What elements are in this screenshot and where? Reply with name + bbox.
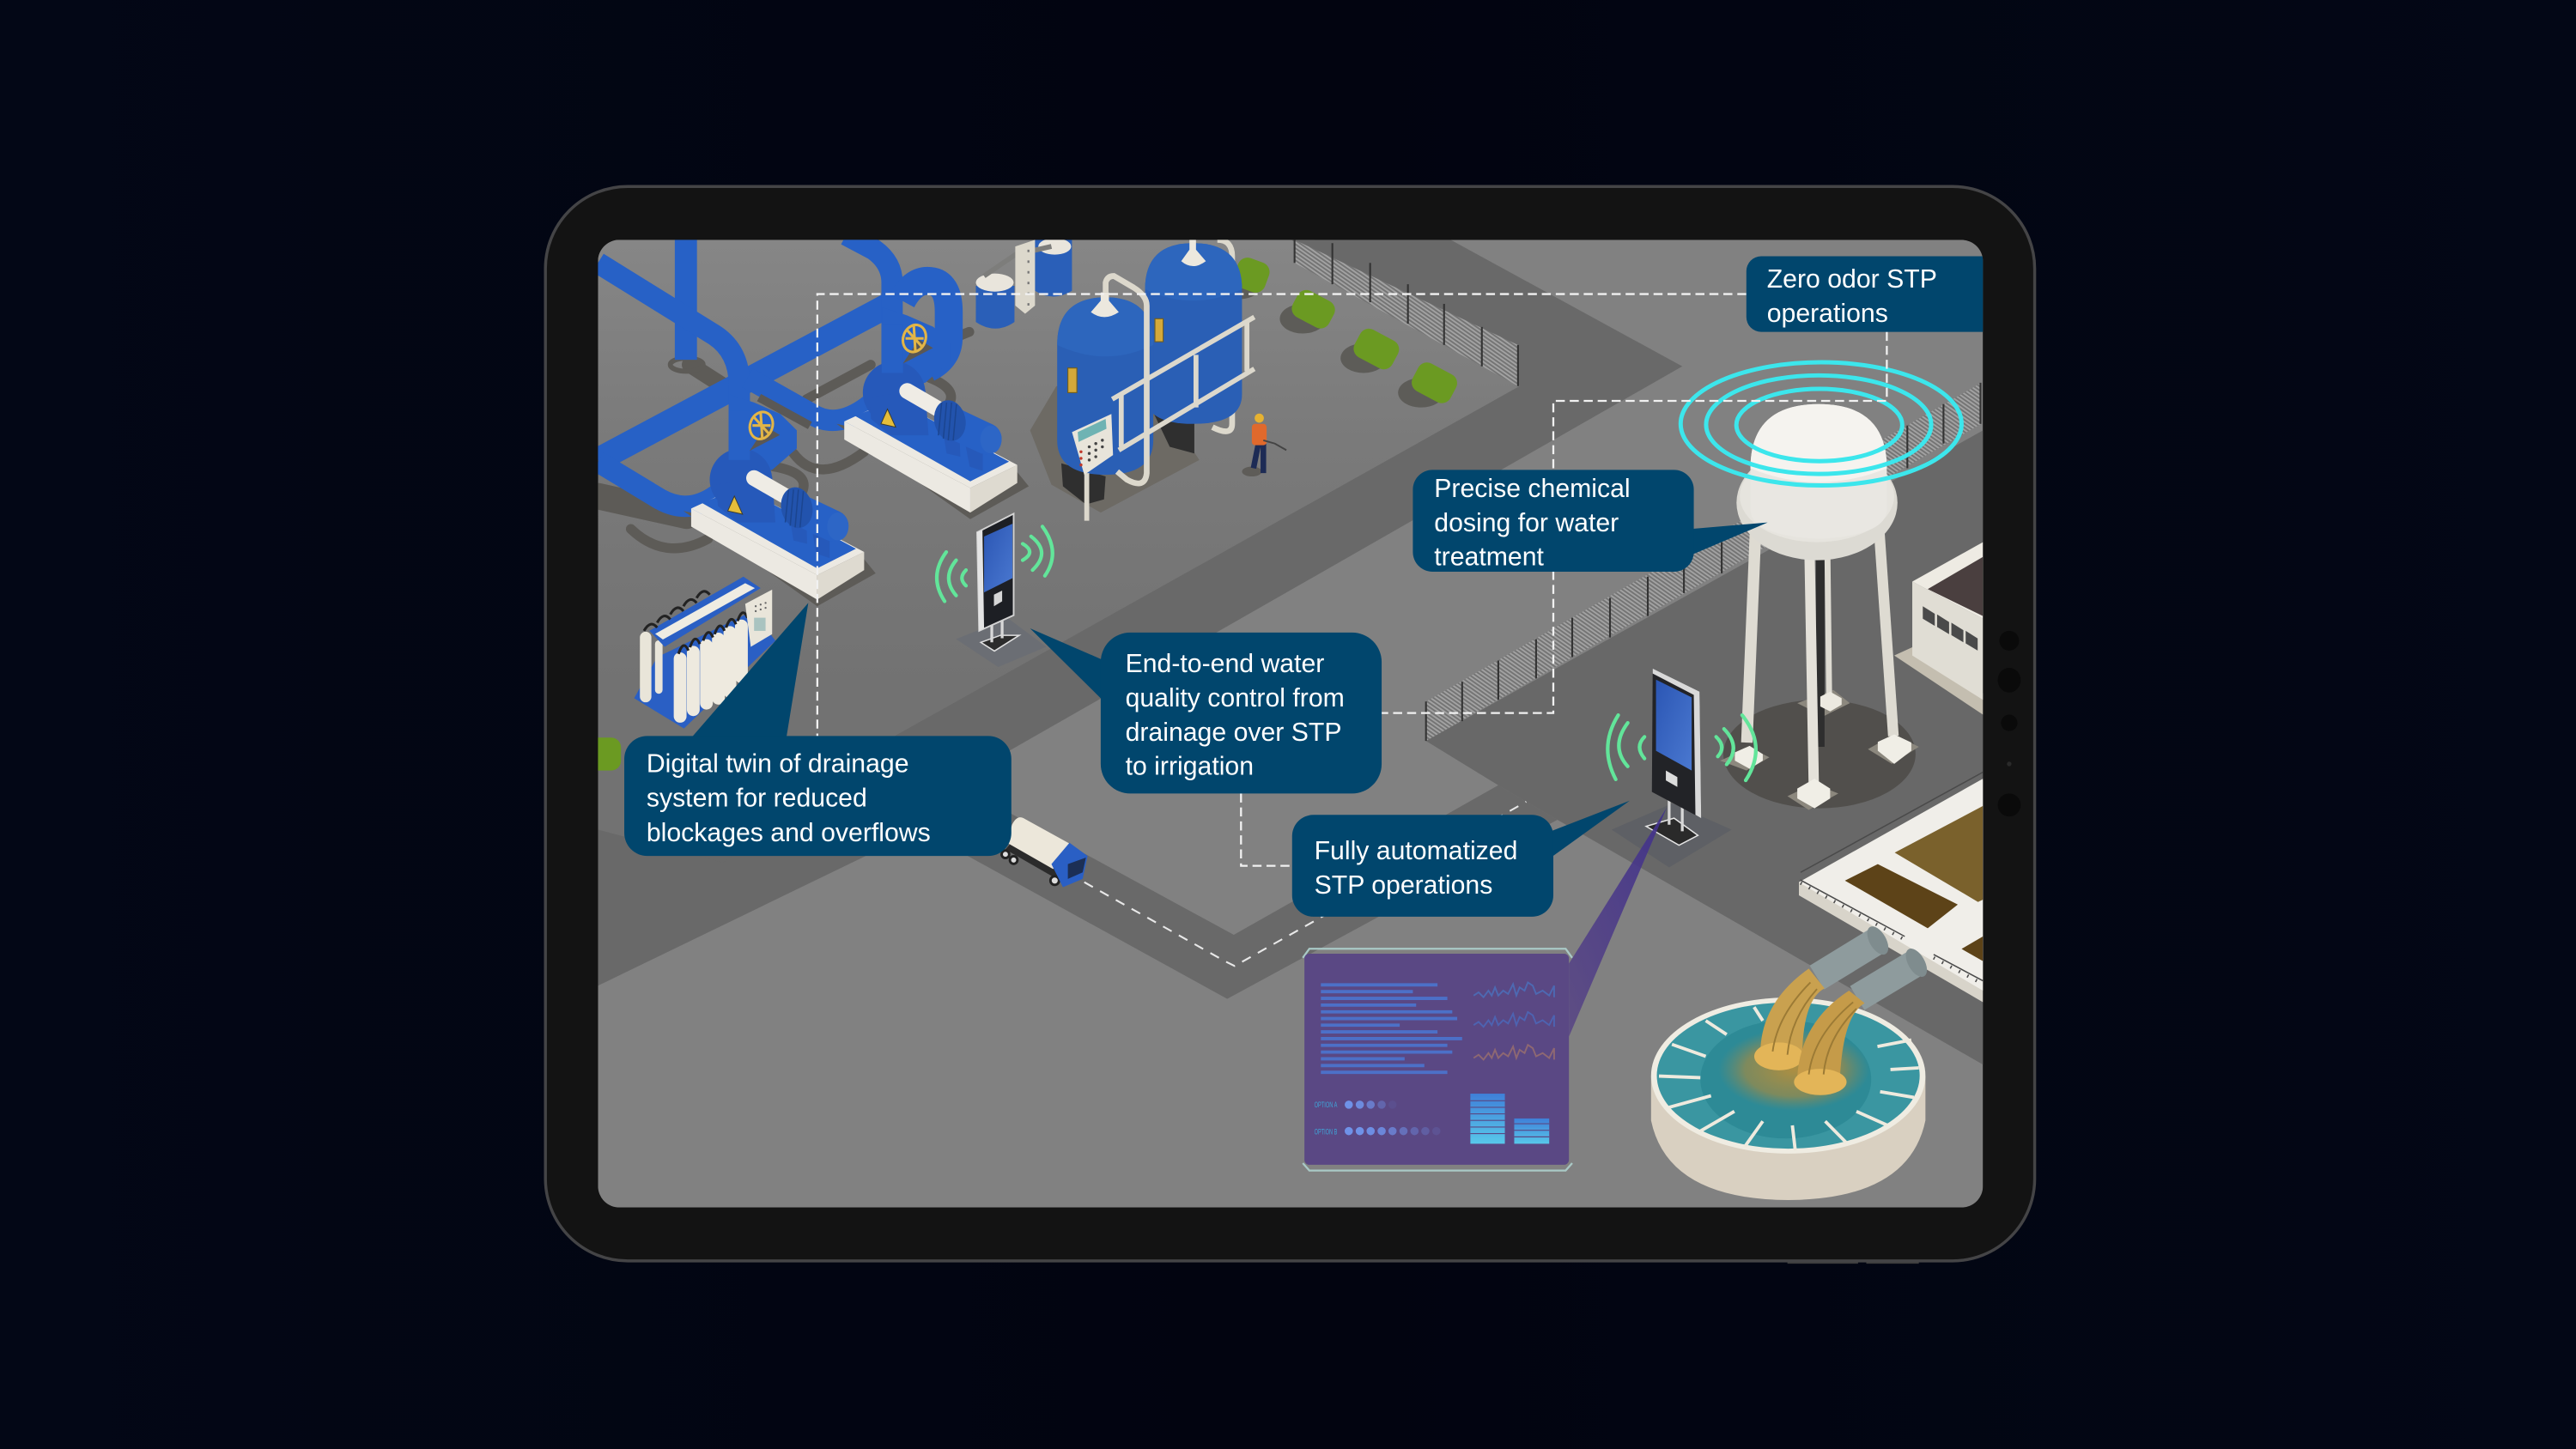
- callout: chemical dosing: Precise chemical: [1434, 475, 1631, 503]
- tanker truck: [1002, 817, 1088, 887]
- front stream: [1797, 991, 1865, 1077]
- motor ribs: [930, 397, 969, 444]
- footing pads: [1720, 690, 1919, 810]
- floor pad: [957, 618, 1046, 667]
- pump and tank lot: [598, 240, 1360, 836]
- asphalt area around tower: [1426, 430, 1983, 1064]
- tablet device: [545, 186, 2035, 1263]
- hoses: [644, 591, 748, 654]
- motor ribs: [777, 484, 817, 531]
- tank two body: [1145, 243, 1242, 424]
- railing posts: [1801, 883, 1983, 984]
- roof interior: [1928, 557, 1983, 616]
- second kiosk wireless signal: [1607, 715, 1756, 780]
- pump housing: [863, 361, 926, 424]
- pump housing: [710, 448, 772, 511]
- callout: water quality: quality control from: [1126, 684, 1345, 712]
- stand: [1646, 818, 1698, 846]
- plinth front: [844, 421, 970, 512]
- tank one plate: [1068, 368, 1077, 392]
- stream texture: [1772, 982, 1856, 1075]
- vertical riser: [680, 239, 692, 360]
- front tubes: [680, 626, 741, 716]
- tank body: [1751, 404, 1886, 539]
- blue pipe network: [598, 235, 949, 506]
- tanker: [1007, 817, 1071, 869]
- worker: [1242, 414, 1286, 476]
- valve body: [883, 307, 950, 390]
- pit two: [1895, 806, 1983, 902]
- plinth shadow: [683, 511, 876, 606]
- right leg: [1880, 534, 1893, 736]
- chassis: [1005, 834, 1070, 881]
- windows: [1923, 606, 1978, 651]
- sparkline three: [1473, 1045, 1554, 1059]
- white drive shaft: [908, 391, 939, 409]
- option b label: OPTION B: [1315, 1127, 1337, 1137]
- reverse osmosis filter unit: [635, 577, 775, 729]
- log lines: [1321, 985, 1462, 1072]
- plinth end: [970, 465, 1018, 512]
- pump neck: [882, 324, 903, 373]
- roof rim: [1912, 543, 1983, 619]
- windscreen: [1068, 858, 1086, 879]
- pit three: [1961, 937, 1983, 961]
- scum stain: [1718, 1028, 1869, 1111]
- weir spokes: [1659, 1007, 1919, 1151]
- callout: zero odor: [1747, 257, 2009, 332]
- gap shadow under feed pipe: [759, 397, 810, 426]
- first kiosk wireless signal: [937, 526, 1053, 601]
- unit base: [635, 611, 775, 729]
- truck route dashes: [1084, 802, 1526, 966]
- motor body: [802, 511, 833, 525]
- tablet bottom edge buttons: [1788, 1262, 1919, 1264]
- bush foliage: [588, 255, 1461, 771]
- platform top: [1799, 779, 1983, 991]
- stand: [981, 635, 1019, 651]
- plinth top lip: [691, 486, 864, 575]
- callout: chemical dosing: treatment: [1434, 543, 1545, 571]
- second pump hoop: [902, 281, 949, 368]
- screen: [984, 524, 1012, 592]
- scanner: [994, 591, 1002, 606]
- option a dots: [1345, 1100, 1396, 1109]
- bushes: [588, 255, 1461, 771]
- left leg: [1747, 534, 1755, 743]
- option a label: OPTION A: [1315, 1100, 1338, 1110]
- motor end cap: [827, 512, 848, 541]
- vest: [1252, 424, 1267, 446]
- callout: automated operations: STP operations: [1315, 871, 1492, 900]
- treatment tanks: [1030, 239, 1255, 521]
- inner water: [1700, 1020, 1871, 1138]
- plinth blue deck: [854, 401, 1009, 482]
- main road band: [699, 240, 1682, 863]
- callout: chemical dosing: [1413, 470, 1768, 572]
- valve body: [729, 394, 797, 476]
- pipe shadows on the ground: [598, 332, 969, 549]
- screen: isometric plant scene: [588, 235, 2009, 1208]
- plinth blue deck: [702, 488, 856, 568]
- feed pipe to second pump: [748, 378, 871, 421]
- callout: water quality: to irrigation: [1126, 752, 1254, 780]
- top plate: [649, 577, 761, 646]
- pit one: [1845, 864, 1958, 928]
- tank one body: [1057, 297, 1153, 475]
- tank one pipe: [1106, 276, 1146, 483]
- truck road: [598, 785, 1558, 999]
- callout: zero odor: Zero odor STP: [1767, 265, 1937, 294]
- first pump with motor on plinth: [683, 394, 876, 606]
- digital dashboard panel: [1303, 949, 1572, 1171]
- screen: [1656, 680, 1692, 771]
- sedimentation basins: [1799, 773, 1983, 1002]
- back leg: [1827, 559, 1829, 696]
- callout: automated operations: Fully automatized: [1315, 837, 1517, 865]
- white drive shaft: [754, 478, 786, 496]
- control cabinet: [745, 590, 772, 646]
- callout: digital twin: Digital twin of drainage: [647, 749, 909, 779]
- tower ground shadow: [1723, 700, 1916, 809]
- panel fill: [1304, 954, 1569, 1165]
- valve shadow: [903, 339, 933, 364]
- bar chart: [1470, 1094, 1549, 1143]
- top elbow: [846, 235, 892, 370]
- callout: water quality: End-to-end water: [1126, 650, 1324, 678]
- motor body: [955, 424, 986, 439]
- front leg: [1809, 555, 1814, 782]
- callout: zero odor: operations: [1767, 300, 1888, 328]
- clarifier tank: [1651, 997, 1925, 1200]
- wheels: [1002, 851, 1059, 885]
- second kiosk: [1612, 669, 1732, 868]
- callout: digital twin: blockages and overflows: [647, 819, 931, 847]
- tank one legs: [1061, 464, 1106, 505]
- floor pad: [1612, 803, 1732, 868]
- utility building: [1894, 543, 1983, 715]
- housing: [1652, 669, 1701, 818]
- pump neck: [729, 410, 750, 460]
- long diagonal main: [598, 301, 896, 460]
- plinth shadow: [836, 424, 1029, 519]
- water tower: [1720, 404, 1919, 810]
- callout: digital twin: system for reduced: [647, 785, 867, 813]
- plinth top lip: [844, 399, 1018, 488]
- cab: [1051, 843, 1088, 887]
- panel frame: [1303, 949, 1572, 1171]
- motor feet: [790, 521, 807, 543]
- service tower: [984, 239, 1051, 314]
- head: [1255, 414, 1264, 422]
- feed pipe to first pump: [598, 462, 720, 506]
- odor sensing rings: [1680, 362, 1961, 486]
- rear stream: [1760, 968, 1825, 1052]
- front outfall pipe: [1857, 963, 1915, 998]
- callout: digital twin: [624, 603, 1012, 856]
- housing: [977, 513, 1013, 631]
- tank two cap: [1182, 239, 1206, 266]
- legs: [1254, 444, 1263, 473]
- scanner: [1666, 771, 1677, 787]
- rim: [1651, 997, 1925, 1154]
- option b dots: [1345, 1127, 1441, 1135]
- valve wheel: [899, 322, 930, 355]
- bezel camera sensors: [1998, 631, 2020, 816]
- water: [1657, 1003, 1920, 1149]
- sprayer: [1263, 440, 1286, 450]
- second pump with motor on plinth: [836, 307, 1029, 519]
- wall: [1912, 581, 1983, 700]
- building plinth: [1894, 647, 1983, 715]
- fence along water tower: [1426, 383, 1981, 741]
- tablet body and bezel: [545, 186, 2035, 1261]
- sparkline two: [1473, 1012, 1554, 1027]
- rear outfall pipe: [1817, 942, 1876, 978]
- dashboard connector beam: [1569, 808, 1667, 1037]
- diagonal pipe with elbow: [598, 254, 750, 410]
- tank one cap: [1091, 293, 1119, 317]
- rear tubes: [642, 638, 648, 696]
- valve shadow: [750, 427, 780, 451]
- callout: water quality: drainage over STP: [1126, 718, 1342, 747]
- valve wheel: [746, 409, 776, 442]
- back leg shadow: [1816, 559, 1825, 747]
- railing: [1801, 773, 1983, 981]
- warning sign: [881, 409, 896, 427]
- platform side: [1799, 780, 1983, 1002]
- access ladder: [1112, 317, 1255, 450]
- first kiosk: [957, 513, 1046, 667]
- callout: chemical dosing: dosing for water: [1434, 509, 1619, 537]
- control panel: [1072, 414, 1113, 521]
- bush shadows: [1242, 288, 1438, 408]
- warning sign: [728, 496, 743, 514]
- outer wall: [1651, 1076, 1925, 1200]
- tank two pipe behind: [1193, 239, 1232, 432]
- callout: automated operations: [1292, 801, 1630, 917]
- outfall pipes and streams: [1754, 923, 1931, 1095]
- motor feet: [944, 433, 960, 457]
- small tank right top: [1035, 239, 1072, 296]
- plinth front: [691, 508, 817, 600]
- fence along parking lot: [1295, 239, 1518, 386]
- ground: [598, 239, 1983, 1208]
- motor end cap: [981, 426, 1002, 453]
- sparkline one: [1473, 982, 1554, 997]
- tank two plate: [1155, 318, 1163, 342]
- tank two legs: [1153, 412, 1194, 453]
- dashed network lines: [817, 294, 1886, 866]
- bowl and flange: [1736, 446, 1898, 561]
- callout: water quality: [1030, 628, 1382, 793]
- plinth end: [817, 552, 864, 600]
- small tank left top: [975, 274, 1014, 329]
- tank ground shadow: [1030, 386, 1200, 512]
